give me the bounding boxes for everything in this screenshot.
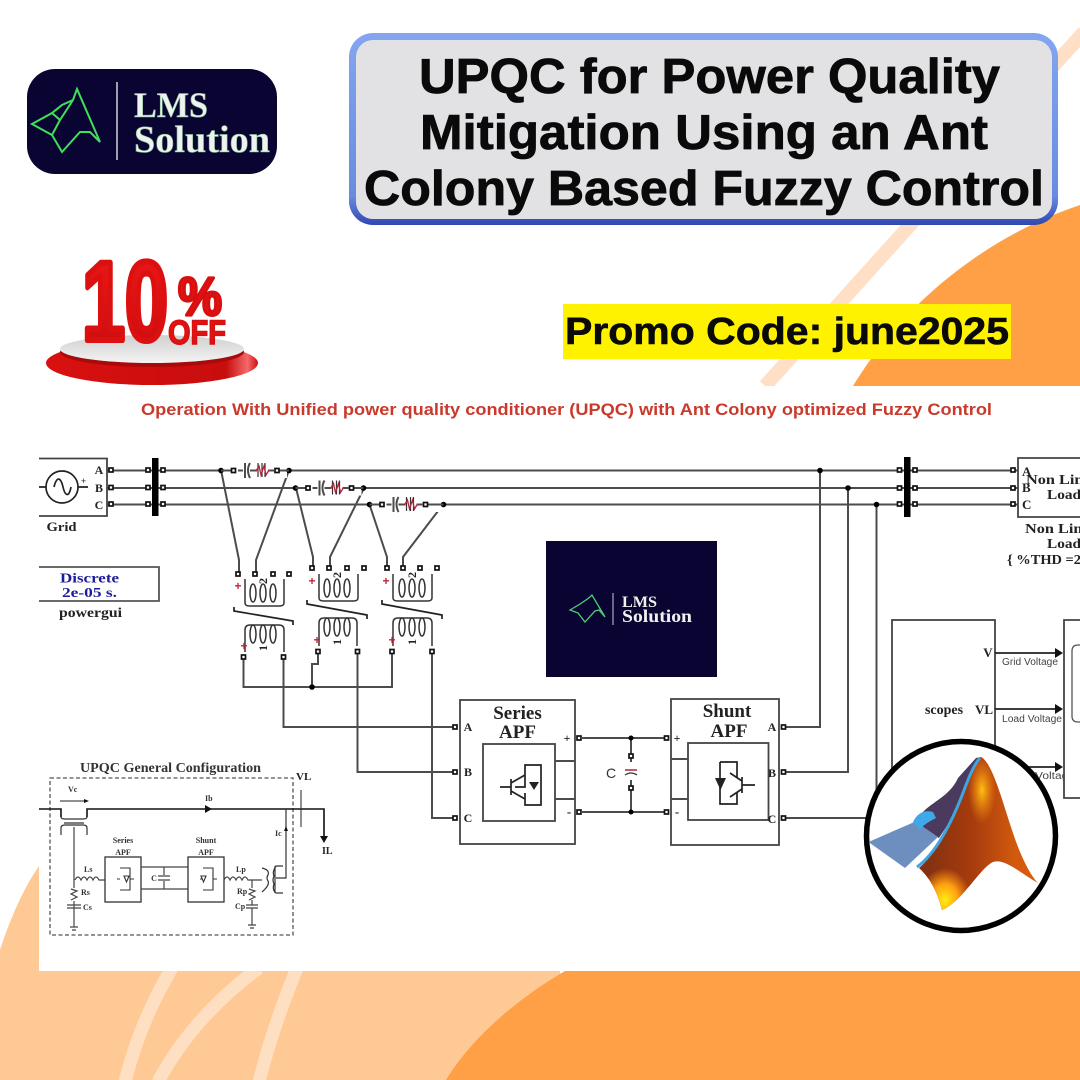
transformer 2: +	[313, 633, 321, 647]
shunt APF block: A	[768, 720, 777, 734]
transformer 1: 2	[256, 578, 270, 584]
membrane back face	[915, 757, 981, 838]
inset shunt APF	[188, 857, 224, 902]
non linear load block: { %THD =2	[1007, 553, 1080, 568]
background: pale diagonal stripe	[765, 32, 1080, 386]
series APF block: +	[564, 731, 571, 745]
non linear load block: B	[1022, 480, 1031, 495]
shunt APF block: Shunt	[703, 701, 752, 722]
logo text: Solution	[134, 119, 270, 161]
UPQC general configuration inset: Series	[113, 836, 133, 845]
transformer 2: 2	[330, 572, 344, 578]
watermark logo: Solution	[622, 606, 692, 626]
series APF block: -	[567, 804, 571, 819]
transformer 1: 1	[256, 645, 270, 651]
UPQC general configuration inset: Shunt	[196, 836, 217, 845]
shunt APF block: APF	[711, 721, 747, 742]
badge off text: OFF	[168, 314, 226, 352]
transformer 1	[234, 572, 293, 659]
badge numerals: 10	[82, 239, 168, 364]
dc link capacitor	[581, 736, 666, 814]
transformer 1: +	[234, 579, 242, 593]
transformer 3: +	[388, 633, 396, 647]
title panel	[349, 33, 1058, 225]
powergui block: Discrete	[60, 570, 119, 586]
inset dc link	[141, 867, 188, 889]
IGBT symbol series	[500, 765, 541, 805]
scopes block: Grid Voltage	[1002, 657, 1058, 668]
UPQC general configuration inset: Cp	[235, 902, 246, 911]
UPQC general configuration inset	[39, 760, 333, 935]
non linear load block	[1007, 458, 1080, 568]
series APF block: Series	[493, 703, 542, 724]
IGBT symbol shunt	[720, 762, 755, 804]
membrane orange surface	[919, 757, 1038, 910]
grid source block: C	[95, 498, 103, 512]
non linear load block: C	[1022, 497, 1031, 512]
scopes block: V	[983, 645, 993, 660]
UPQC general configuration inset: UPQC General Configuration	[80, 760, 262, 775]
UPQC general configuration inset: Ls	[84, 865, 92, 874]
inset left branch	[67, 827, 105, 930]
transformer 2	[307, 566, 367, 654]
transformer 2: +	[308, 574, 316, 588]
powergui block: powergui	[59, 605, 122, 620]
inset series APF	[105, 857, 141, 902]
UPQC general configuration inset: IL	[322, 846, 333, 857]
UPQC general configuration inset: Lp	[236, 865, 246, 874]
badge percent sign: %	[178, 267, 222, 327]
non linear load block: Load	[1047, 488, 1080, 503]
UPQC general configuration inset: Cs	[83, 903, 92, 912]
diagram heading: Operation With Unified power quality conditioner (UPQC) with Ant Colony optimized Fuzzy Control	[141, 400, 992, 419]
UPQC general configuration inset: APF	[198, 848, 214, 857]
transformer 1: +	[240, 639, 248, 653]
powergui block	[39, 567, 159, 620]
scope display block	[1064, 620, 1080, 798]
inset right branch	[224, 877, 262, 928]
UPQC general configuration inset: Ic	[275, 829, 282, 838]
background: light orange shape	[0, 866, 560, 1080]
background: dark orange bottom-right shape	[446, 971, 1080, 1080]
shunt APF block: -	[675, 804, 679, 819]
transformer 2: 1	[330, 639, 344, 645]
shunt APF block: B	[768, 766, 776, 780]
grid source block: A	[95, 463, 104, 477]
UPQC general configuration inset: Rp	[237, 887, 248, 896]
series APF block: C	[464, 811, 472, 825]
scopes block: VL	[975, 702, 993, 717]
UPQC general configuration inset: VL	[296, 771, 311, 783]
series APF block: B	[464, 765, 472, 779]
watermark logo	[546, 541, 717, 677]
UPQC general configuration inset: Vc	[68, 785, 78, 794]
membrane blue plate	[868, 822, 938, 868]
bus bar right	[817, 457, 1015, 517]
UPQC general configuration inset: Rs	[81, 888, 90, 897]
inset shunt transformer	[262, 809, 286, 893]
icon: MATLAB membrane logo	[866, 742, 1056, 932]
title text	[364, 50, 1044, 216]
watermark logo: LMS	[622, 594, 657, 611]
scopes block: Voltage	[1035, 771, 1076, 782]
shunt APF block: C	[768, 812, 776, 826]
background: dark orange top-right shape	[853, 205, 1080, 386]
transformer 3: 2	[405, 572, 419, 578]
scopes block: Load Voltage	[1002, 714, 1062, 725]
membrane blue glow	[913, 811, 936, 830]
background: pale swoosh strokes	[125, 968, 297, 1080]
dc link capacitor: C	[606, 765, 616, 781]
three-phase bus lines	[107, 470, 1018, 818]
series impedance phase A	[218, 462, 292, 478]
title text: Colony Based Fuzzy Control	[364, 162, 1044, 216]
UPQC general configuration inset: Ib	[205, 794, 213, 803]
powergui block: 2e-05 s.	[62, 585, 117, 600]
logo text: LMS	[134, 85, 208, 125]
logo divider	[116, 82, 118, 160]
bus bar left	[109, 458, 165, 516]
shunt APF block: +	[674, 731, 681, 745]
inset series transformer	[61, 817, 87, 835]
scopes block: scopes	[925, 703, 964, 718]
shunt APF block	[664, 699, 786, 845]
scopes block	[892, 620, 1080, 800]
podium	[46, 335, 258, 385]
inset main line	[39, 809, 324, 837]
membrane highlight edge	[917, 758, 980, 867]
non linear load block: A	[1022, 464, 1032, 479]
promo code: Promo Code: june2025	[565, 311, 1009, 353]
UPQC general configuration inset: C	[151, 874, 157, 883]
UPQC general configuration inset: APF	[115, 848, 131, 857]
series APF block: APF	[499, 722, 536, 743]
transformer 3	[309, 566, 442, 690]
logo: LMS Solution	[27, 69, 277, 174]
title text: Mitigation Using an Ant	[420, 106, 988, 160]
discount badge: 10% off	[46, 239, 258, 385]
transformer 3: 1	[405, 639, 419, 645]
scope signal arrows	[995, 653, 1056, 767]
logo text	[134, 85, 270, 161]
grid source block: B	[95, 481, 103, 495]
title text: UPQC for Power Quality	[419, 50, 1000, 104]
grid source block: +	[81, 476, 86, 486]
series impedance phase B	[293, 480, 366, 496]
series APF block	[453, 700, 581, 844]
panel: circuit diagram	[39, 386, 1080, 971]
series APF block: A	[464, 720, 473, 734]
grid label: Grid	[46, 519, 77, 534]
logo icon	[32, 89, 100, 152]
grid source block	[39, 458, 107, 534]
series impedance phase C	[367, 496, 446, 512]
transformer 3: +	[382, 574, 390, 588]
non linear load block: Load	[1047, 537, 1080, 552]
